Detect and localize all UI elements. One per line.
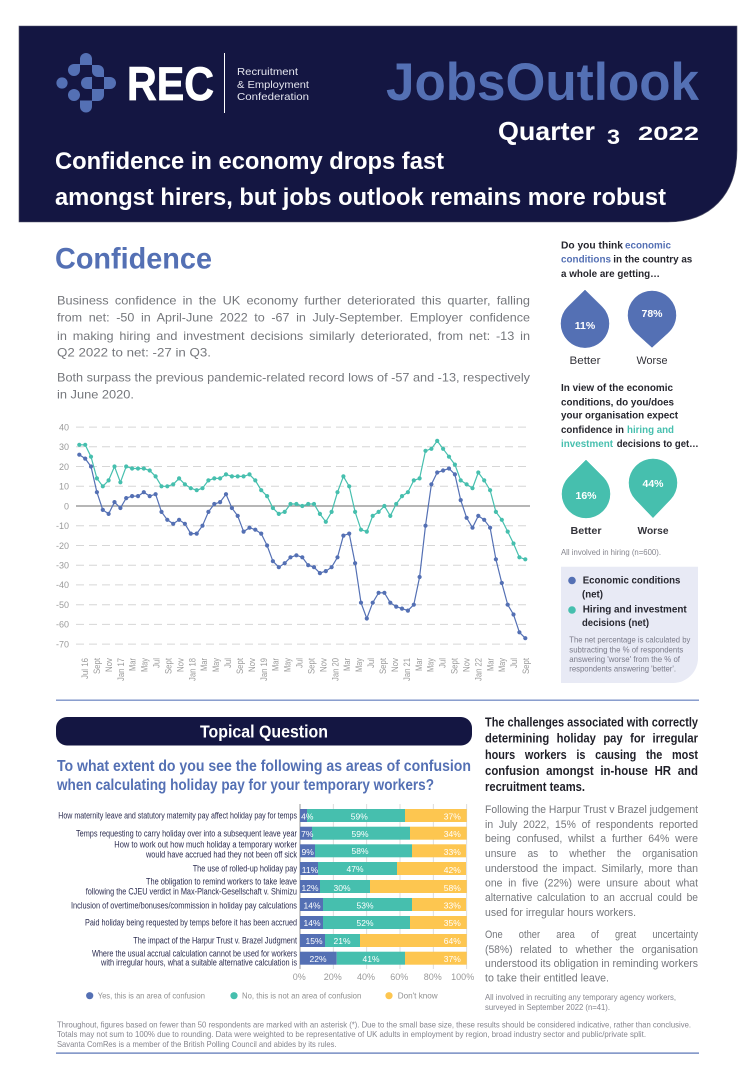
legend: economic conditions: Economic conditions [583, 574, 681, 586]
x axis labels: Mar [485, 658, 495, 671]
edition: 3 [607, 126, 620, 149]
question: economic conditions [561, 240, 692, 280]
headline [55, 148, 666, 211]
stacked bar chart: holiday pay confusion [58, 804, 474, 982]
right column body text [485, 804, 698, 985]
icon: better drop 11% [561, 290, 609, 367]
row: rolled-up: The use of rolled-up holiday pay [193, 864, 297, 874]
row: irregular hours: 22% [309, 954, 327, 964]
question: hiring and investment: investment [561, 438, 613, 450]
row: maternity leave: 59% [351, 812, 368, 822]
icon: worse drop 44% [629, 459, 677, 537]
base note: temporary workers: surveyed in September 2022 (n=41). [485, 1003, 610, 1012]
bar chart legend [86, 991, 438, 1001]
y axis labels: 10 [59, 482, 69, 492]
x axis labels: Jul [509, 658, 519, 668]
heading: Topical Question: Topical Question [200, 722, 328, 742]
row: overtime: 14% [303, 900, 321, 910]
x axis labels: Jan 20 [330, 658, 340, 681]
x axis labels: Nov [318, 657, 328, 672]
x axis labels: Mar [414, 658, 424, 671]
x axis labels: Jul [366, 658, 376, 668]
icon: worse drop 78% [628, 291, 676, 367]
question: economic conditions: economic [625, 240, 671, 252]
right column key finding [485, 715, 699, 794]
x axis labels: Nov [461, 657, 471, 672]
question: hiring and investment [561, 382, 699, 450]
panel: chart legend [561, 567, 698, 683]
legend: hiring and investment [568, 604, 687, 629]
footnotes [57, 1021, 691, 1049]
series: hiring and investment decisions [79, 441, 525, 559]
text block: confidence summary: Business confidence in the UK economy further deteriorated this quarter, falling [57, 294, 530, 308]
note: net percentage [569, 636, 691, 674]
question: economic conditions: conditions [561, 254, 611, 266]
right column body text: one in five (22%) were unsure about what [485, 877, 698, 889]
x axis percentages: 60% [390, 972, 408, 982]
headline: amongst hirers, but jobs outlook remains more robust [55, 184, 666, 211]
y axis labels: -30 [56, 560, 69, 570]
row: CJEU verdict: 58% [444, 883, 461, 893]
chart question heading: To what extent do you see the following as areas of confusion [57, 758, 471, 775]
x axis labels: Jul [438, 658, 448, 668]
base note: temporary workers: All involved in recruiting any temporary agency workers, [485, 993, 676, 1002]
row: accrued when off sick: How to work out how much holiday a temporary worker [114, 840, 297, 850]
x axis labels: May [497, 657, 507, 672]
x axis labels: Mar [199, 658, 209, 671]
row: accrued when off sick: 33% [444, 847, 461, 857]
x axis labels: Sept [163, 658, 173, 674]
row: irregular hours: 37% [444, 954, 461, 964]
row: carry over [76, 827, 467, 840]
y axis labels: 40 [59, 422, 69, 432]
row: accrued when off sick: 9% [302, 847, 314, 857]
row: irregular hours: 41% [362, 954, 380, 964]
y axis labels: -70 [56, 639, 69, 649]
right column body text: to take their entitled leave. [485, 973, 609, 985]
note: net percentage: The net percentage is calculated by [569, 636, 691, 645]
row: overtime [71, 898, 466, 911]
row: CJEU verdict: 30% [333, 883, 351, 893]
row: before accrued: 35% [444, 918, 461, 928]
row: irregular hours [92, 949, 467, 968]
question: hiring and investment: confidence in [561, 424, 624, 436]
icon: worse drop 44%: 44% [642, 478, 664, 490]
y axis labels: -50 [56, 600, 69, 610]
row: rolled-up: 11% [302, 865, 319, 875]
row: before accrued [85, 916, 467, 929]
row: maternity leave: How maternity leave and statutory maternity pay affect holiday pay for temps [58, 811, 297, 821]
x axis labels: Nov [104, 657, 114, 672]
right column body text: in July 2022, 15% of respondents reported [485, 819, 698, 831]
bar chart legend: Don't know [398, 991, 438, 1001]
row: maternity leave [58, 809, 467, 822]
y axis labels [56, 422, 69, 649]
x axis labels: Jul 16 [80, 658, 90, 679]
right column key finding: hours workers is causing the most [485, 747, 699, 762]
right column body text: understood the impact. Similarly, more than [485, 863, 698, 875]
row: maternity leave: 37% [444, 812, 461, 822]
x axis labels: Nov [247, 657, 257, 672]
row: accrued when off sick [114, 840, 466, 860]
note: net percentage: respondents answering 'better'. [569, 665, 676, 674]
footnotes: Throughout, figures based on fewer than 50 respondents are marked with an asterisk (*). Due to the small base size, these results should be considered indicative, rather than conclusive. [57, 1021, 691, 1030]
text block: confidence summary: in June 2020. [57, 388, 134, 402]
text block: confidence summary [57, 294, 530, 402]
row: accrued when off sick: 58% [351, 846, 369, 856]
x axis labels: Sept [450, 658, 460, 674]
right column body text: Following the Harpur Trust v Brazel judgement [485, 804, 698, 816]
x axis labels: Jan 17 [116, 658, 126, 681]
x axis labels [80, 657, 531, 681]
x axis percentages [293, 972, 474, 982]
row: rolled-up: 47% [346, 864, 364, 874]
row: carry over: 59% [351, 829, 369, 839]
x axis labels: Jul [152, 658, 162, 668]
heading: Confidence: Confidence [55, 242, 212, 276]
question: hiring and investment: decisions to get… [617, 438, 699, 450]
edition [498, 116, 699, 149]
text block: confidence summary: Q2 2022 to net: -27 in Q3. [57, 346, 211, 360]
y axis labels: -40 [56, 580, 69, 590]
base note: hiring: All involved in hiring (n=600). [561, 548, 661, 557]
logo strapline: & Employment [237, 79, 309, 91]
question: hiring and investment: conditions, do you/does [561, 396, 674, 408]
x axis labels: Mar [271, 658, 281, 671]
logo strapline: Confederation [237, 91, 309, 103]
x axis labels: Nov [390, 657, 400, 672]
legend: economic conditions: (net) [582, 588, 603, 600]
x axis labels: Sept [521, 658, 531, 674]
row: before accrued: Paid holiday being requested by temps before it has been accrued [85, 918, 297, 928]
y axis labels: 30 [59, 442, 69, 452]
row: Harpur Trust [133, 934, 467, 947]
question: hiring and investment: your organisation expect [561, 410, 678, 422]
row: carry over: 7% [301, 829, 314, 839]
x axis percentages: 100% [451, 972, 474, 982]
logo strapline [237, 66, 309, 103]
right column key finding: determining holiday pay for irregular [485, 731, 698, 746]
icon: better drop 11%: Better [570, 355, 601, 367]
right column body text: unsure as to whether the organisation [485, 848, 698, 860]
question: economic conditions: Do you think [561, 240, 623, 252]
y axis labels: -20 [56, 541, 69, 551]
publication title: JobsOutlook [386, 53, 700, 112]
row: rolled-up: 42% [444, 865, 461, 875]
right column body text: understood its obligation in reminding workers [485, 958, 698, 970]
x axis labels: May [354, 657, 364, 672]
edition: 2022 [638, 123, 699, 145]
row: CJEU verdict: 12% [301, 883, 319, 893]
text block: confidence summary: from net: -50 in April-June 2022 to -67 in July-September. Employer confidence [57, 310, 530, 324]
x axis percentages: 20% [324, 972, 342, 982]
x axis labels: Jan 21 [402, 658, 412, 681]
icon: better drop 11%: 11% [575, 320, 596, 332]
question: hiring and investment: hiring and [627, 424, 674, 436]
x axis percentages: 80% [424, 972, 442, 982]
note: net percentage: subtracting the % of respondents [569, 645, 683, 654]
row: CJEU verdict: following the CJEU verdict in Max-Planck-Gesellschaft v. Shimizu [86, 887, 297, 897]
legend: hiring and investment: decisions (net) [582, 617, 649, 629]
row: rolled-up [193, 862, 466, 875]
chart question heading [56, 758, 471, 794]
edition: Quarter [498, 116, 595, 146]
right column key finding: recruitment teams. [485, 779, 585, 794]
right column key finding: The challenges associated with correctly [485, 715, 699, 730]
icon: worse drop 78%: Worse [636, 355, 668, 367]
line chart: net confidence 2016-2022 [56, 422, 531, 681]
row: carry over: Temps requesting to carry holiday over into a subsequent leave year [76, 829, 297, 839]
row: irregular hours: with irregular hours, what a suitable alternative calculation is [100, 958, 297, 968]
legend: hiring and investment: Hiring and investment [583, 604, 687, 616]
icon: worse drop 78%: 78% [641, 308, 663, 320]
right column body text: alternative calculation to an accrual could be [485, 892, 698, 904]
x axis labels: Mar [128, 658, 138, 671]
question: economic conditions: in the country as [613, 254, 692, 266]
heading: Topical Question [56, 717, 472, 746]
series: economic conditions [79, 455, 525, 638]
x axis labels: Mar [342, 658, 352, 671]
icon: better drop 16%: Better [570, 525, 602, 537]
row: CJEU verdict: The obligation to remind workers to take leave [146, 877, 297, 887]
row: overtime: Inclusion of overtime/bonuses/commission in holiday pay calculations [71, 901, 297, 911]
header banner [19, 26, 737, 222]
bar chart legend: Yes, this is an area of confusion [98, 991, 205, 1001]
icon: better drop 16% [562, 460, 610, 537]
x axis labels: Sept [92, 658, 102, 674]
right column body text: (58%) related to whether the organisation [485, 944, 698, 956]
row: overtime: 33% [444, 900, 461, 910]
y axis labels: 0 [64, 501, 69, 511]
text block: confidence summary: in making hiring and investment decisions similarly deteriorated, from net: -13 in [57, 329, 530, 343]
y axis labels: -10 [56, 521, 69, 531]
x axis labels: Sept [235, 658, 245, 674]
x axis labels: Nov [175, 657, 185, 672]
icon: REC logo mark [56, 53, 116, 112]
row: irregular hours: Where the usual accrual calculation cannot be used for workers [92, 949, 297, 959]
x axis labels: Jan 18 [187, 658, 197, 681]
x axis labels: May [426, 657, 436, 672]
logo wordmark REC: REC [127, 57, 214, 110]
x axis labels: Jan 19 [259, 658, 269, 681]
x axis labels: May [211, 657, 221, 672]
bar chart legend: No, this is not an area of confusion [242, 991, 361, 1001]
legend: economic conditions [568, 574, 681, 600]
question: hiring and investment: In view of the economic [561, 382, 673, 394]
x axis labels: May [140, 657, 150, 672]
right column key finding: confusion amongst in-house HR and [485, 763, 698, 778]
x axis labels: Jul [295, 658, 305, 668]
row: before accrued: 52% [356, 918, 374, 928]
chart question heading: when calculating holiday pay for your temporary workers? [56, 777, 434, 794]
icon: worse drop 44%: Worse [638, 525, 669, 537]
base note: temporary workers [485, 993, 676, 1012]
right column body text: used for irregular hours workers. [485, 907, 636, 919]
footnotes: Savanta ComRes is a member of the British Polling Council and abides by its rules. [57, 1040, 336, 1049]
text block: confidence summary: Both surpass the previous pandemic-related record lows of -57 and -13, respectively [57, 370, 530, 384]
row: Harpur Trust: 15% [305, 936, 323, 946]
note: net percentage: answering 'worse' from the % of [569, 655, 681, 664]
row: overtime: 53% [356, 900, 374, 910]
y axis labels: 20 [59, 462, 69, 472]
y axis labels: -60 [56, 620, 69, 630]
footnotes: Totals may not sum to 100% due to rounding. Data were weighted to be representative of UK adults in employment by region, broad industry sector and public/private split. [57, 1030, 646, 1039]
icon: better drop 16%: 16% [575, 490, 597, 502]
right column body text: being confused, whilst a further 64% were [485, 833, 698, 845]
row: before accrued: 14% [303, 918, 321, 928]
row: carry over: 34% [444, 829, 461, 839]
x axis percentages: 0% [293, 972, 306, 982]
x axis percentages: 40% [357, 972, 375, 982]
headline: Confidence in economy drops fast [55, 148, 444, 175]
row: CJEU verdict [86, 877, 467, 897]
x axis labels: Sept [378, 658, 388, 674]
x axis labels: May [283, 657, 293, 672]
row: Harpur Trust: The impact of the Harpur Trust v. Brazel Judgment [133, 935, 297, 945]
logo strapline: Recruitment [237, 66, 298, 78]
row: Harpur Trust: 21% [333, 936, 351, 946]
right column body text: One other area of great uncertainty [485, 929, 698, 941]
x axis labels: Sept [306, 658, 316, 674]
row: maternity leave: 4% [301, 812, 314, 822]
x axis labels: Jul [223, 658, 233, 668]
row: Harpur Trust: 64% [444, 936, 461, 946]
question: economic conditions: a whole are getting… [561, 268, 660, 280]
x axis labels: Jan 22 [473, 658, 483, 681]
row: accrued when off sick: would have accrued had they not been off sick [145, 850, 297, 860]
